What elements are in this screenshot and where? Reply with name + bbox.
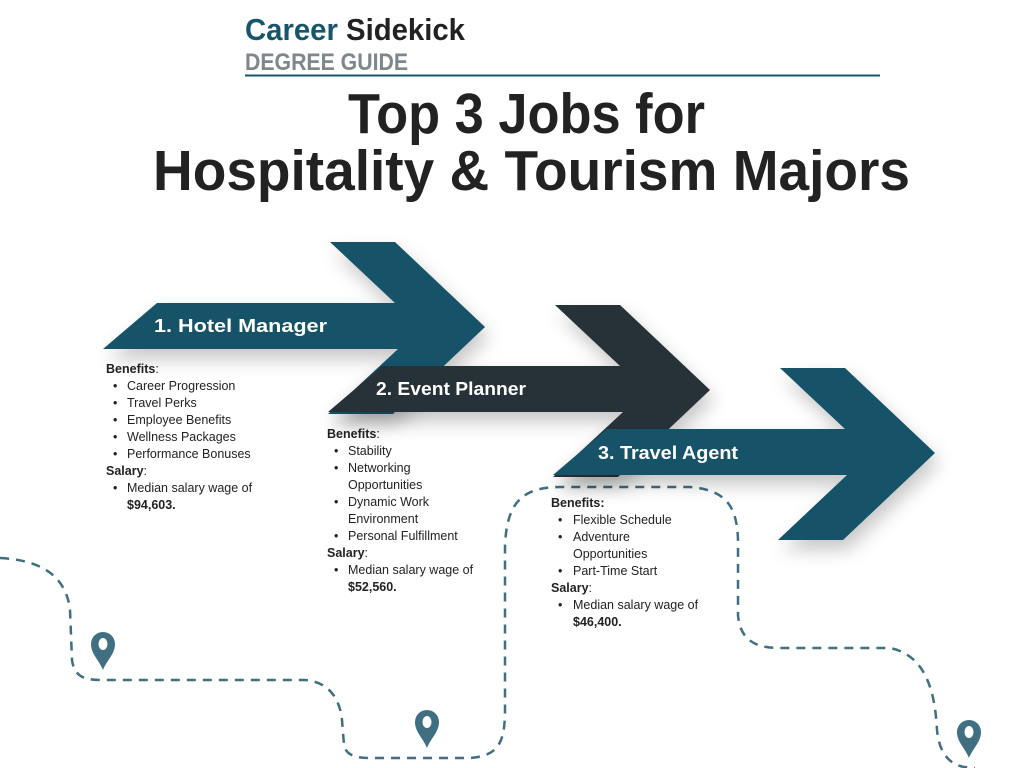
- text block: Travel Agent details: Salary:: [551, 581, 592, 595]
- text block: Hotel Manager details: •: [113, 413, 117, 427]
- text block: Travel Agent details: •: [558, 513, 562, 527]
- arrow 1: Hotel Manager: 1. Hotel Manager: [154, 316, 327, 336]
- text block: Travel Agent details: Flexible Schedule: [573, 513, 672, 527]
- text block: Event Planner details: Environment: [348, 512, 419, 526]
- text block: Travel Agent details: Benefits:: [551, 496, 604, 510]
- text block: Event Planner details: Networking: [348, 461, 411, 475]
- text block: Event Planner details: $52,560.: [348, 580, 397, 594]
- text block: Travel Agent details: [551, 496, 699, 629]
- text block: Travel Agent details: Opportunities: [573, 547, 647, 561]
- text block: Event Planner details: Median salary wage of: [348, 563, 474, 577]
- text block: Hotel Manager details: $94,603.: [127, 498, 176, 512]
- icon: location pin 2: [415, 710, 439, 748]
- text block: Travel Agent details: •: [558, 564, 562, 578]
- title: [153, 82, 910, 203]
- text block: Event Planner details: •: [334, 461, 338, 475]
- text block: Travel Agent details: •: [558, 598, 562, 612]
- header: DEGREE GUIDE: DEGREE GUIDE: [245, 49, 408, 76]
- text block: Hotel Manager details: •: [113, 396, 117, 410]
- text block: Event Planner details: •: [334, 444, 338, 458]
- text block: Travel Agent details: •: [558, 530, 562, 544]
- title: Top 3 Jobs for: [348, 82, 705, 146]
- text block: Hotel Manager details: •: [113, 481, 117, 495]
- text block: Hotel Manager details: Career Progression: [127, 379, 235, 393]
- text block: Event Planner details: Stability: [348, 444, 393, 458]
- title: Hospitality & Tourism Majors: [153, 139, 910, 203]
- icon: location pin 3: [957, 720, 981, 758]
- header: Career Sidekick: Career Sidekick: [245, 12, 466, 47]
- text block: Hotel Manager details: Performance Bonuses: [127, 447, 251, 461]
- text block: Event Planner details: Dynamic Work: [348, 495, 430, 509]
- text block: Travel Agent details: $46,400.: [573, 615, 622, 629]
- text block: Event Planner details: Benefits:: [327, 427, 380, 441]
- text block: Travel Agent details: Median salary wage of: [573, 598, 699, 612]
- text block: Hotel Manager details: Salary:: [106, 464, 147, 478]
- text block: Hotel Manager details: Benefits:: [106, 362, 159, 376]
- text block: Travel Agent details: Part-Time Start: [573, 564, 658, 578]
- arrow 3: Travel Agent: 3. Travel Agent: [598, 443, 738, 463]
- text block: Hotel Manager details: Median salary wage of: [127, 481, 253, 495]
- text block: Hotel Manager details: Employee Benefits: [127, 413, 231, 427]
- text block: Hotel Manager details: Travel Perks: [127, 396, 197, 410]
- text block: Event Planner details: •: [334, 495, 338, 509]
- text block: Hotel Manager details: [106, 362, 253, 512]
- text block: Hotel Manager details: •: [113, 379, 117, 393]
- text block: Hotel Manager details: •: [113, 447, 117, 461]
- text block: Travel Agent details: Adventure: [573, 530, 630, 544]
- text block: Event Planner details: •: [334, 529, 338, 543]
- text block: Hotel Manager details: •: [113, 430, 117, 444]
- text block: Event Planner details: [327, 427, 474, 594]
- text block: Event Planner details: Salary:: [327, 546, 368, 560]
- text block: Event Planner details: Opportunities: [348, 478, 422, 492]
- text block: Event Planner details: Personal Fulfillment: [348, 529, 458, 543]
- text block: Event Planner details: •: [334, 563, 338, 577]
- arrow 2: Event Planner: [328, 305, 710, 477]
- text block: Hotel Manager details: Wellness Packages: [127, 430, 236, 444]
- dashed route path: [0, 487, 975, 768]
- arrow 1: Hotel Manager: [103, 242, 485, 414]
- arrow 2: Event Planner: 2. Event Planner: [376, 379, 526, 399]
- icon: location pin 1: [91, 632, 115, 670]
- arrow 3: Travel Agent: [553, 368, 935, 540]
